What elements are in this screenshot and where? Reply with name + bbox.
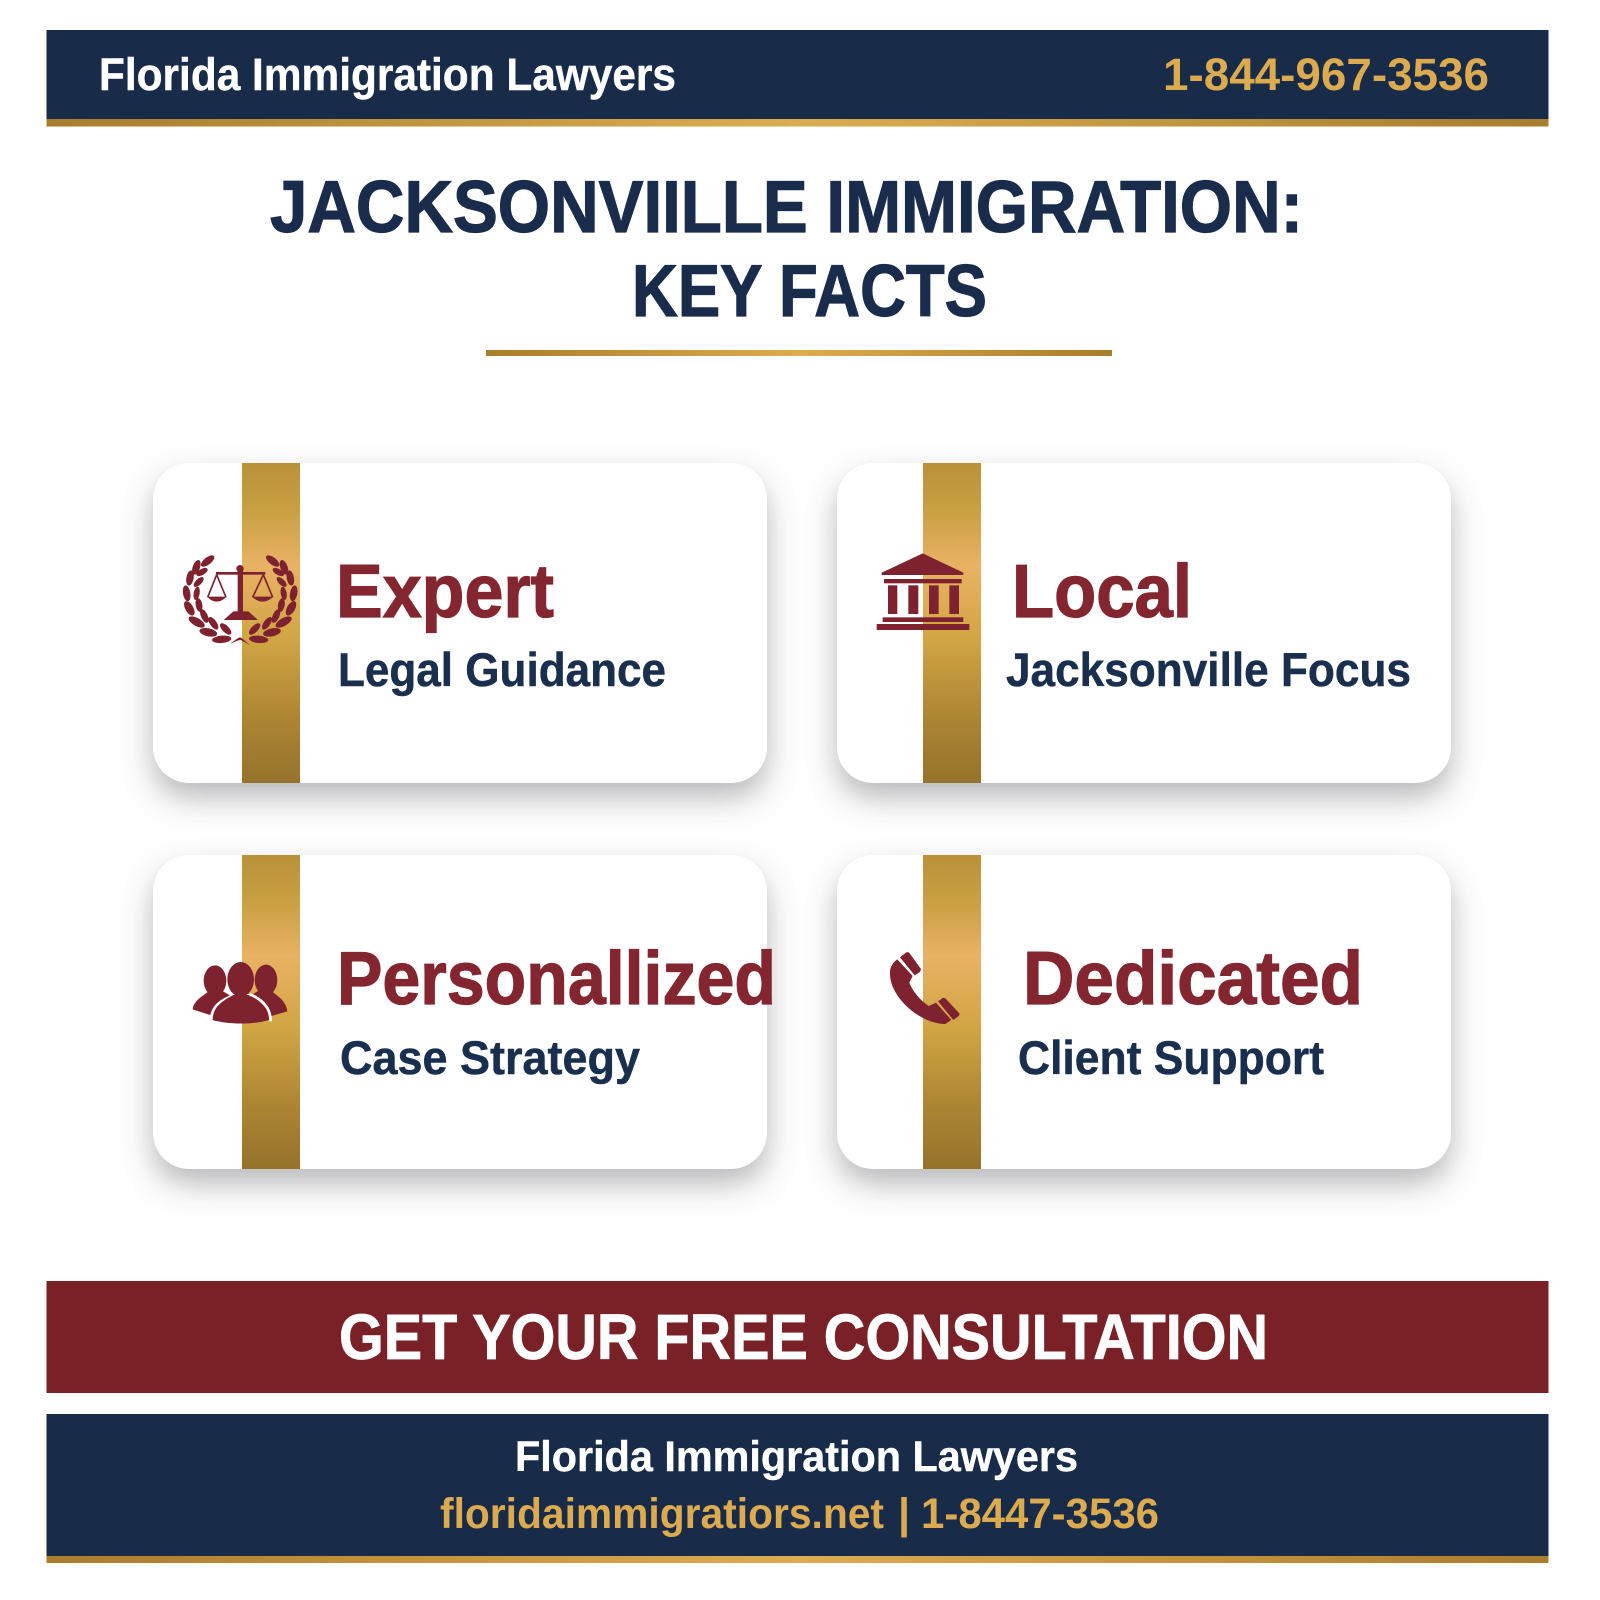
title: JACKSONVIILLE IMMIGRATION: (270, 167, 1303, 248)
header bar (46, 30, 1548, 126)
local heading: Local (1012, 549, 1192, 633)
panel: local (837, 463, 1451, 783)
icon: courthouse (877, 553, 969, 630)
footer firm name: Florida Immigration Lawyers (515, 1433, 1078, 1481)
icon: telephone handset (890, 952, 959, 1024)
panel: expert (153, 463, 767, 783)
title underline (486, 350, 1112, 356)
local subtext: Jacksonville Focus (1006, 643, 1411, 696)
icon: scales with laurel wreath (182, 553, 299, 645)
footer website and phone: | (898, 1490, 910, 1538)
expert heading: Expert (336, 549, 554, 633)
header firm name: Florida Immigration Lawyers (99, 49, 676, 100)
title: KEY FACTS (632, 251, 987, 332)
footer website and phone (440, 1490, 1159, 1538)
personalized heading: Personallized (337, 936, 776, 1020)
footer website and phone: 1-8447-3536 (921, 1490, 1159, 1538)
panel: dedicated (837, 855, 1451, 1169)
dedicated subtext: Client Support (1018, 1031, 1324, 1084)
footer website and phone: floridaimmigratiors.net (440, 1490, 884, 1538)
dedicated heading: Dedicated (1023, 936, 1363, 1020)
call to action text: GET YOUR FREE CONSULTATION (339, 1301, 1268, 1373)
header phone number: 1-844-967-3536 (1163, 49, 1489, 100)
icon: group of people (193, 962, 287, 1023)
call to action banner (46, 1281, 1548, 1393)
personalized subtext: Case Strategy (340, 1031, 640, 1084)
panel: personalized (153, 855, 776, 1169)
footer bar (46, 1414, 1548, 1563)
expert subtext: Legal Guidance (338, 643, 666, 696)
title (270, 167, 1303, 332)
